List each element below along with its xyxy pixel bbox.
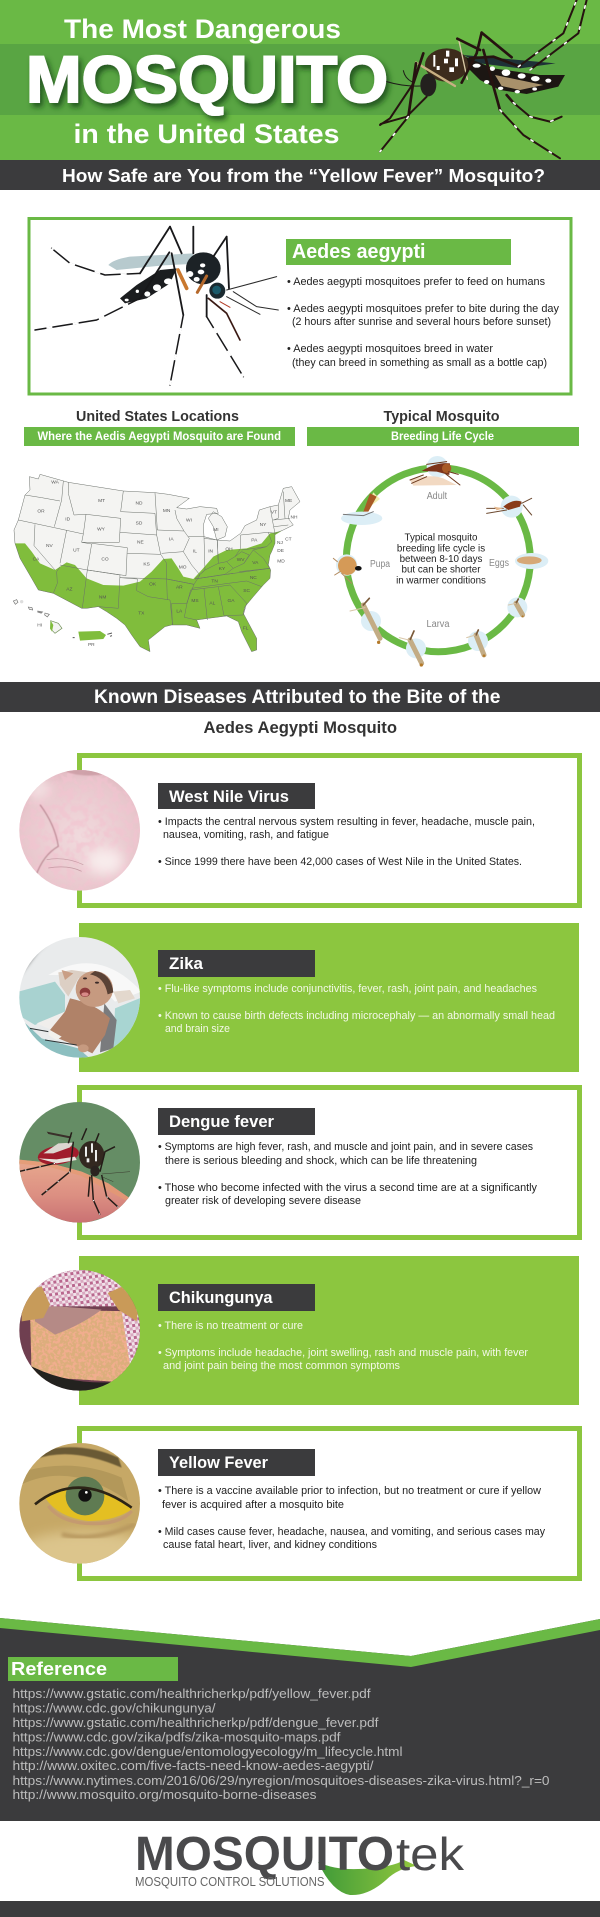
text block: • Flu-like symptoms include conjunctivitis, fever, rash, joint pain, and headaches [158, 983, 537, 995]
text block: Aedes facts: • Aedes aegypti mosquitoes breed in water [287, 343, 493, 355]
text block: • Since 1999 there have been 42,000 cases of West Nile in the United States. [158, 856, 522, 868]
state labels: CT [285, 536, 292, 542]
photo: abdominal rash [19, 1270, 140, 1391]
text block: Aedes facts: • Aedes aegypti mosquitoes prefer to bite during the day [287, 303, 559, 315]
state labels: NJ [277, 540, 284, 546]
text: cycle description: breeding life cycle is [397, 543, 485, 554]
state labels: OR [37, 508, 45, 514]
text block: reference links: https://www.cdc.gov/dengue/entomologyecology/m_lifecycle.html [12, 1745, 402, 1759]
text block: and brain size [165, 1023, 230, 1035]
panel: Yellow Fever [15, 1428, 580, 1578]
text block: reference links: https://www.nytimes.com/2016/06/29/nyregion/mosquitoes-diseases-zika-virus.html?_r=0 [12, 1774, 550, 1788]
state labels: OH [225, 547, 233, 553]
state labels: UT [73, 548, 80, 554]
icons: life cycle stages [333, 456, 548, 667]
text block: reference links: https://www.cdc.gov/zika/pdfs/zika-mosquito-maps.pdf [12, 1730, 341, 1744]
text block: • Symptoms are high fever, rash, and muscle and joint pain, and in severe cases [158, 1141, 533, 1153]
text block: nausea, vomiting, rash, and fatigue [163, 829, 329, 841]
state labels: IL [193, 549, 197, 555]
state labels: MN [163, 508, 171, 514]
state labels: PA [251, 538, 258, 544]
panel: Aedes aegypti [29, 218, 571, 394]
text block: there is serious bleeding and shock, which can be life threatening [165, 1155, 477, 1167]
photo: jaundiced eye [19, 1443, 140, 1564]
state labels: MO [179, 564, 187, 570]
text block: reference links: http://www.oxitec.com/five-facts-need-know-aedes-aegypti/ [12, 1759, 374, 1773]
label: Aedes aegypti [286, 239, 511, 265]
state labels: SD [136, 520, 143, 526]
title bar [158, 950, 315, 977]
state labels: VT [271, 509, 277, 515]
state labels: TN [211, 579, 218, 585]
state labels: KS [143, 562, 150, 568]
state labels: NE [137, 539, 144, 545]
state labels: CO [101, 557, 109, 563]
state labels: NY [260, 522, 267, 528]
state labels: NM [99, 595, 106, 601]
state labels: NH [290, 515, 298, 521]
text block: • Mild cases cause fever, headache, nausea, and vomiting, and serious cases may [158, 1526, 545, 1538]
text block: reference links: https://www.gstatic.com/healthricherkp/pdf/yellow_fever.pdf [12, 1687, 371, 1701]
ring [346, 468, 530, 652]
logo: MOSQUITOtek: MOSQUITO CONTROL SOLUTIONS [135, 1875, 324, 1889]
heading: United States Locations: Where the Aedis Aegypti Mosquito are Found [38, 429, 281, 443]
heading: Typical Mosquito: Typical Mosquito [384, 408, 500, 425]
state labels: VA [252, 560, 259, 566]
state labels: NC [250, 575, 257, 581]
state labels: IN [208, 549, 214, 555]
text block [158, 1141, 537, 1207]
section heading: known diseases: Known Diseases Attributed to the Bite of the [94, 686, 501, 708]
state labels: LA [176, 609, 183, 615]
subtitle bar: How Safe are You from the “Yellow Fever” Mosquito? [62, 166, 545, 186]
state labels: PR [88, 642, 95, 648]
text block: Aedes facts: (2 hours after sunrise and several hours before sunset) [292, 316, 551, 328]
text block [158, 1320, 528, 1372]
text block: reference links: http://www.mosquito.org/mosquito-borne-diseases [12, 1788, 316, 1802]
title bar: Dengue fever [169, 1112, 274, 1131]
title bar [158, 1449, 315, 1476]
state labels: ME [285, 498, 293, 504]
panel: Zika [15, 923, 579, 1072]
state labels: DE [277, 548, 285, 554]
label: Aedes aegypti: Aedes aegypti [292, 241, 426, 263]
panel: West Nile Virus [15, 756, 580, 906]
text block: • Symptoms include headache, joint swelling, rash and muscle pain, with fever [158, 1347, 528, 1359]
state labels: TX [138, 610, 145, 616]
text block: Aedes facts: • Aedes aegypti mosquitoes prefer to feed on humans [287, 276, 545, 288]
logo: MOSQUITOtek [135, 1828, 465, 1895]
state labels: MS [191, 598, 199, 604]
text block [158, 1485, 545, 1551]
text block: • There is no treatment or cure [158, 1320, 303, 1332]
icon: header mosquito [380, 0, 587, 158]
state labels: OK [149, 582, 157, 588]
title bar [158, 1108, 315, 1135]
state labels: AR [176, 585, 183, 591]
state labels: CA [33, 557, 40, 563]
labels: stages: Eggs [489, 558, 509, 569]
heading: Typical Mosquito [307, 408, 579, 446]
subtitle bar [0, 160, 600, 190]
heading: United States Locations: United States Locations [76, 408, 239, 425]
title bar: Yellow Fever [169, 1453, 268, 1472]
state labels: IA [169, 537, 174, 543]
state labels: MI [213, 527, 219, 533]
logo: MOSQUITOtek: tek [396, 1828, 465, 1880]
icon: mosquito illustration [35, 227, 278, 385]
state labels: WI [186, 518, 192, 524]
text block: fever is acquired after a mosquito bite [162, 1499, 344, 1511]
text block: • Known to cause birth defects including microcephaly — an abnormally small head [158, 1010, 555, 1022]
text: cycle description: but can be shorter [402, 565, 481, 576]
section heading: known diseases: Aedes Aegypti Mosquito [204, 719, 397, 737]
logo: MOSQUITOtek: MOSQUITO [135, 1828, 394, 1881]
heading: Reference: Reference [11, 1659, 107, 1679]
text: cycle description: Typical mosquito [405, 533, 478, 544]
state labels: MD [277, 559, 285, 565]
heading: Typical Mosquito: Breeding Life Cycle [391, 429, 494, 443]
text: cycle description: in warmer conditions [396, 575, 486, 586]
state labels [33, 479, 298, 648]
text: cycle description: between 8-10 days [400, 554, 482, 565]
state labels: AZ [66, 587, 72, 593]
state labels: WA [51, 479, 60, 485]
state labels: WV [237, 557, 245, 563]
labels: stages: Pupa [370, 559, 390, 570]
state labels: ID [65, 517, 71, 523]
state labels: WY [97, 527, 106, 533]
photo: mosquito on skin [15, 1100, 145, 1225]
section heading: known diseases [0, 682, 600, 737]
heading: Reference [8, 1657, 178, 1681]
panel: Dengue fever [15, 1088, 580, 1238]
photo: rash [15, 768, 145, 893]
state labels: HI [37, 622, 42, 628]
labels: stages: Adult [427, 491, 447, 502]
title bar: Chikungunya [169, 1288, 273, 1307]
title bar [158, 783, 315, 809]
state labels: ND [135, 500, 143, 506]
text: cycle description [396, 533, 486, 586]
title bar: West Nile Virus [169, 787, 289, 806]
icon: leaf [318, 1860, 417, 1895]
header banner [0, 0, 600, 160]
text block [158, 983, 555, 1035]
labels: stages: Larva [426, 619, 450, 630]
Hawaii and Puerto Rico [13, 600, 112, 641]
state labels: NV [46, 543, 53, 549]
state labels: FL [243, 626, 249, 632]
text block: and joint pain being the most common symptoms [163, 1360, 400, 1372]
text block: • Those who become infected with the virus a second time are at a significantly [158, 1182, 537, 1194]
heading: United States Locations [24, 408, 295, 446]
state labels: KY [219, 566, 226, 572]
text block: reference links: https://www.cdc.gov/chikungunya/ [12, 1702, 216, 1716]
title: in the United States: in the United States [74, 119, 340, 149]
text block: Aedes facts: (they can breed in something as small as a bottle cap) [292, 357, 547, 369]
footer: references [0, 1618, 600, 1821]
text block: greater risk of developing severe disease [165, 1195, 361, 1207]
chart: United States map [13, 474, 300, 652]
text block [158, 816, 535, 868]
state labels: AL [209, 601, 216, 607]
text block: reference links: https://www.gstatic.com/healthricherkp/pdf/dengue_fever.pdf [12, 1716, 379, 1730]
photo: infant [15, 935, 145, 1060]
labels: stages [370, 491, 509, 630]
title: MOSQUITO: MOSQUITO [26, 42, 388, 116]
text block: • There is a vaccine available prior to infection, but no treatment or cure if yellow [158, 1485, 541, 1497]
title bar: Zika [169, 954, 204, 973]
state labels: SC [243, 588, 251, 594]
text block: cause fatal heart, liver, and kidney conditions [163, 1539, 377, 1551]
title: The Most Dangerous: The Most Dangerous [64, 14, 341, 44]
text block: • Impacts the central nervous system resulting in fever, headache, muscle pain, [158, 816, 535, 828]
footer bar [0, 1901, 600, 1917]
text block: Aedes facts [287, 276, 559, 369]
state labels: MT [98, 498, 105, 504]
text block: reference links [12, 1687, 550, 1802]
chart: breeding life cycle [333, 456, 548, 667]
title bar [158, 1284, 315, 1311]
panel: Chikungunya [15, 1256, 579, 1405]
state labels: GA [227, 598, 235, 604]
